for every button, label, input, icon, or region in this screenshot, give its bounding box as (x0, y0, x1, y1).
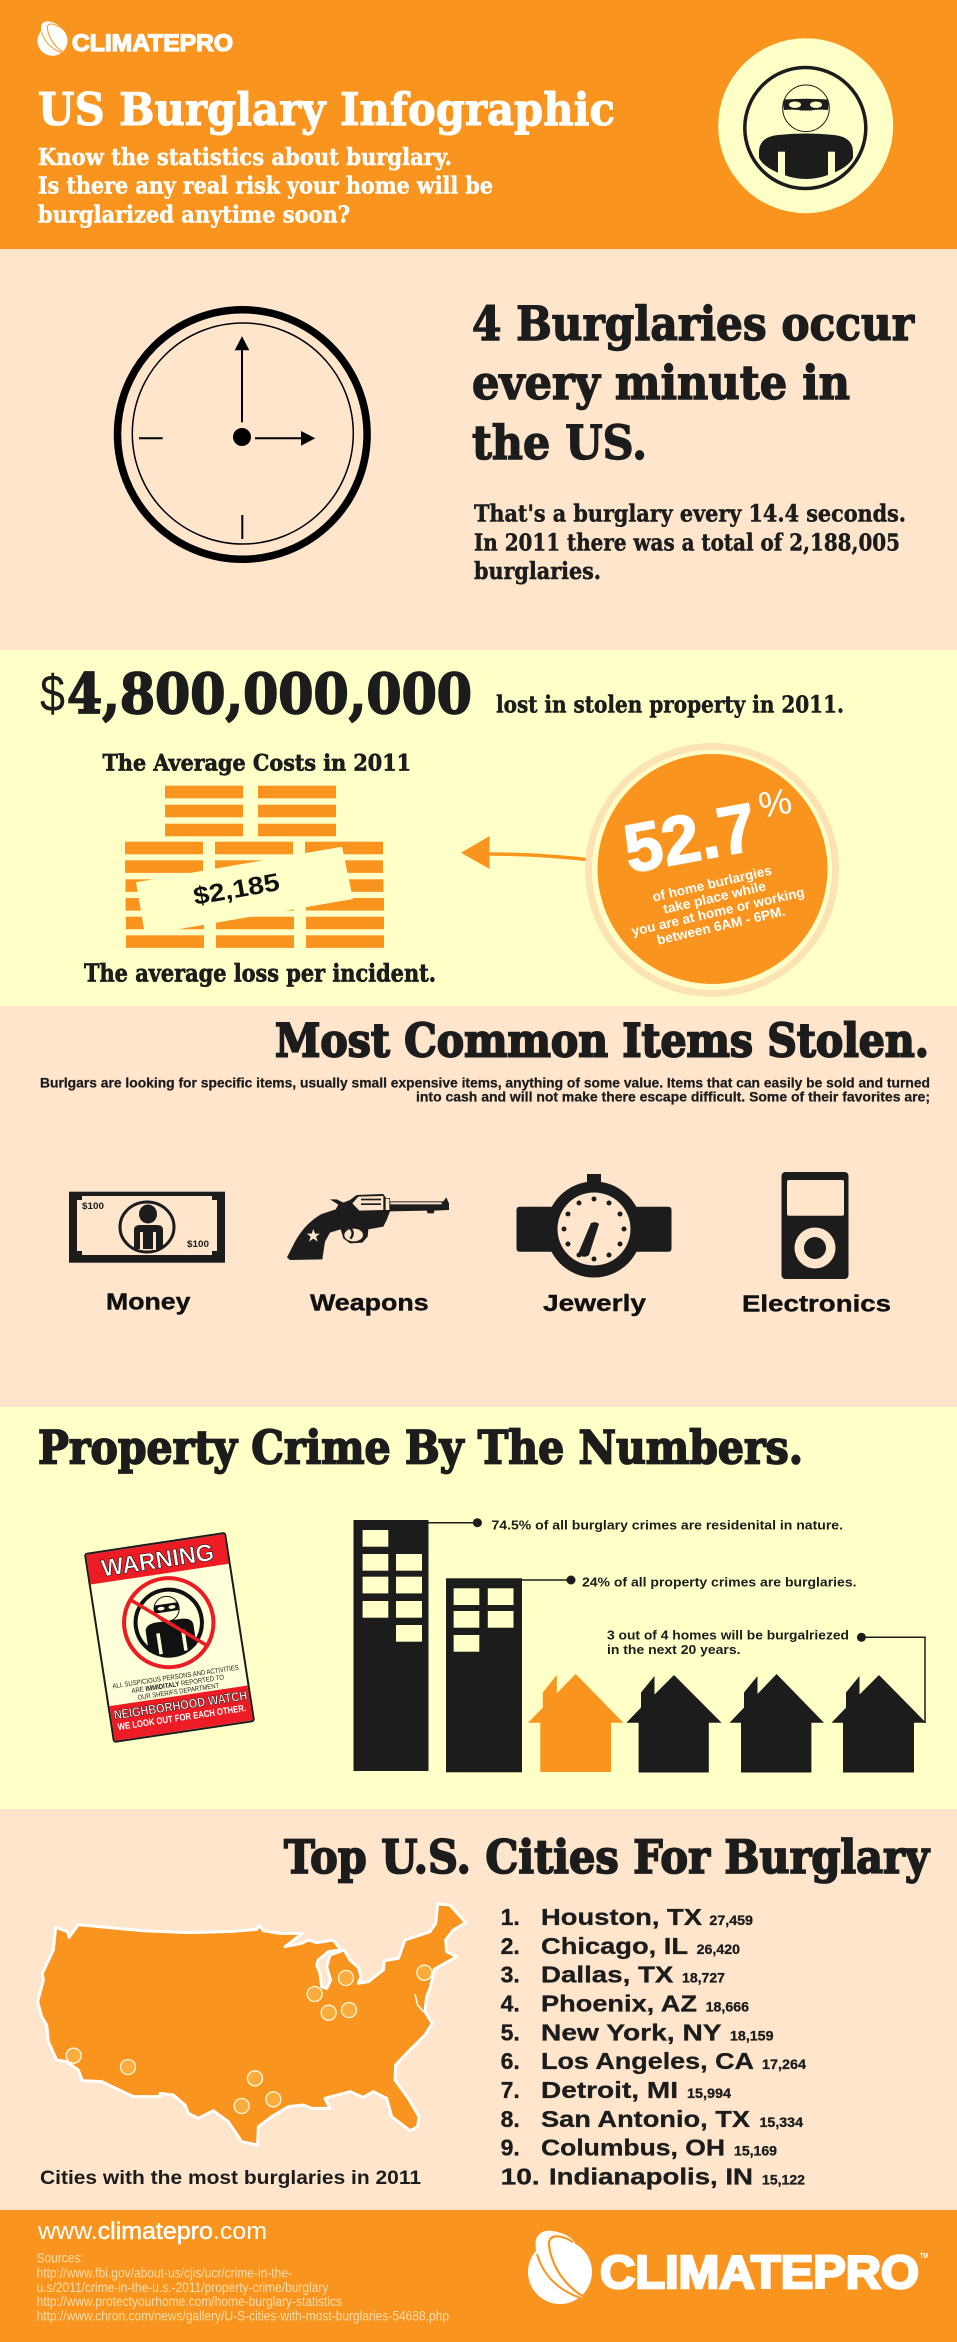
badge: 52.7 percent: 52.7 (618, 789, 763, 888)
list: cities: Detroit, MI (541, 2077, 678, 2103)
icon: revolver (287, 1194, 449, 1260)
icon: black house 3 (832, 1675, 926, 1772)
caption: average loss: The average loss per incident. (84, 959, 436, 988)
chart: stacks of cash (125, 786, 384, 948)
icon: money (69, 1192, 225, 1263)
list: cities: Dallas, TX (541, 1962, 674, 1988)
list: cities: 6. (501, 2048, 520, 2074)
text: sources: http://www.chron.com/news/gallery/U-S-cities-with-most-burglaries-54688.php (37, 2308, 449, 2324)
list: cities: 4. (501, 1990, 520, 2016)
label: $2,185 tag: $2,185 (191, 868, 282, 911)
building: short (446, 1578, 522, 1772)
logo: ClimatePro large: CLIMATEPRO (600, 2246, 919, 2298)
list: cities: 15,122 (762, 2172, 805, 2188)
labels: item names: Money (106, 1288, 190, 1314)
panel: top cities (0, 1809, 957, 2210)
icon: money: $100 (187, 1239, 209, 1250)
sign: neighborhood watch warning: ARE IMMIDITALY REPORTED TO (131, 1674, 225, 1695)
list: cities: 10. (501, 2164, 540, 2190)
list: cities: 26,420 (697, 1942, 740, 1957)
callout: 3 out of 4 homes (607, 1628, 925, 1723)
callout: 24 percent: 24% of all property crimes are burglaries. (582, 1576, 856, 1590)
labels: item names: Electronics (742, 1291, 891, 1317)
list: cities: 17,264 (762, 2057, 807, 2072)
badge: 52.7 percent: % (755, 780, 795, 826)
icon: black house 2 (730, 1674, 824, 1772)
arrow (461, 836, 600, 869)
icon: money: $100 (82, 1201, 104, 1212)
callout: 3 out of 4 homes: 3 out of 4 homes will be burgalriezed (607, 1628, 849, 1642)
list: cities: Indianapolis, IN (549, 2164, 753, 2190)
icon: black house 1 (626, 1675, 722, 1772)
sign: neighborhood watch warning: NEIGHBORHOOD WATCH (113, 1688, 248, 1723)
text: website: www.climatepro.com (37, 2218, 267, 2245)
labels: item names (106, 1288, 891, 1317)
badge: 52.7 percent: of home burlargies (651, 863, 773, 905)
list: cities: New York, NY (541, 2019, 722, 2045)
panel: footer (0, 2210, 957, 2342)
map: united states (38, 1904, 466, 2145)
logo: ClimatePro small (37, 21, 233, 57)
sign: neighborhood watch warning (85, 1533, 254, 1742)
building: tall (354, 1520, 428, 1771)
text: sources: u.s/2011/crime-in-the-u.s.-2011/property-crime/burglary (37, 2280, 329, 2295)
badge: 52.7 percent: you are at home or working (630, 884, 806, 939)
sign: neighborhood watch warning: WE LOOK OUT FOR EACH OTHER. (117, 1703, 247, 1733)
list: cities: 18,727 (682, 1971, 725, 1986)
list: cities: 15,994 (687, 2086, 732, 2101)
text: burglary every 14.4 seconds: That's a burglary every 14.4 seconds. (474, 500, 906, 528)
stat: 4.8 billion: $ (40, 665, 65, 723)
list: cities: 18,159 (730, 2028, 774, 2043)
list: cities: San Antonio, TX (541, 2106, 751, 2132)
list: cities: 18,666 (706, 2000, 750, 2014)
sign: neighborhood watch warning: ALL SUSPICIOUS PERSONS AND ACTIVITIES (112, 1665, 240, 1690)
list: cities: Chicago, IL (541, 1933, 688, 1959)
stat: 4.8 billion: lost in stolen property in 2011. (496, 691, 844, 719)
heading: 4 burglaries: every minute in (472, 356, 850, 411)
list: cities: 15,334 (760, 2115, 804, 2130)
panel: stolen property costs (0, 650, 957, 1006)
icon: watch (516, 1174, 672, 1278)
list: cities: 1. (501, 1904, 520, 1930)
list: cities: 2. (501, 1933, 520, 1959)
list: cities: Houston, TX (541, 1904, 703, 1930)
callout: 3 out of 4 homes: in the next 20 years. (607, 1643, 740, 1657)
list: cities: 3. (501, 1962, 520, 1988)
subtitle: Is there any real risk your home will be (38, 172, 493, 200)
list: cities: 15,169 (734, 2144, 777, 2159)
list: cities: 9. (501, 2135, 520, 2161)
heading: 4 burglaries: 4 Burglaries occur (472, 297, 915, 352)
sign: neighborhood watch warning: WARNING (100, 1539, 216, 1583)
heading: average costs: The Average Costs in 2011 (102, 751, 411, 777)
badge: 52.7 percent (585, 743, 839, 997)
icon: burglar in circle (718, 38, 893, 213)
panel: most common items stolen (0, 1006, 957, 1407)
text: burglary every 14.4 seconds: burglaries. (474, 557, 601, 585)
text: sources (37, 2250, 449, 2324)
panel: property crime numbers (0, 1407, 957, 1809)
caption: cities: Cities with the most burglaries in 2011 (40, 2167, 421, 2189)
text: sources: http://www.protectyourhome.com/home-burglary-statistics (37, 2294, 342, 2309)
logo: ClimatePro small: CLIMATEPRO (72, 30, 233, 57)
list: cities: Columbus, OH (541, 2135, 725, 2161)
text: sources: Sources: (37, 2250, 84, 2266)
logo: ClimatePro large: TM (920, 2253, 928, 2260)
heading: 4 burglaries (472, 297, 915, 471)
icon: music player (782, 1172, 848, 1279)
text: intro: Burlgars are looking for specific items, usually small expensive items, anything of some value. Items that can easily be sold and turned (40, 1075, 930, 1090)
icon: orange house (528, 1674, 623, 1772)
sign: neighborhood watch warning: OUR SHERIFS DEPARTMENT (137, 1683, 220, 1702)
text: intro (40, 1075, 930, 1105)
heading: property crime: Property Crime By The Numbers. (38, 1420, 803, 1474)
logo: ClimatePro large (528, 2231, 928, 2304)
list: cities (501, 1904, 807, 2190)
text: sources: http://www.fbi.gov/about-us/cjis/ucr/crime-in-the- (37, 2266, 292, 2280)
subtitle: burglarized anytime soon? (38, 201, 350, 229)
list: cities: 5. (501, 2019, 520, 2045)
badge: 52.7 percent: between 6AM - 6PM. (655, 904, 786, 948)
subtitle: Know the statistics about burglary. (38, 143, 452, 171)
subtitle (38, 143, 493, 229)
list: cities: Phoenix, AZ (541, 1990, 697, 2016)
panel: burglaries per minute (0, 249, 957, 650)
list: cities: 8. (501, 2106, 520, 2132)
heading: 4 burglaries: the US. (472, 416, 647, 471)
stat: 4.8 billion (40, 661, 844, 726)
text: intro: into cash and will not make there escape difficult. Some of their favorites are; (416, 1090, 930, 1105)
labels: item names: Jewerly (543, 1290, 646, 1316)
icon: clock (118, 310, 367, 559)
list: cities: Los Angeles, CA (541, 2048, 754, 2074)
list: cities: 27,459 (709, 1913, 753, 1928)
list: cities: 7. (501, 2077, 520, 2103)
panel: header (0, 0, 957, 249)
stat: 4.8 billion: 4,800,000,000 (67, 661, 472, 726)
text: burglary every 14.4 seconds (474, 500, 906, 585)
title: US Burglary Infographic (38, 83, 615, 136)
label: $2,185 tag (136, 847, 353, 935)
callout: 74.5 percent: 74.5% of all burglary crimes are residenital in nature. (492, 1518, 843, 1532)
labels: item names: Weapons (310, 1290, 429, 1316)
badge: 52.7 percent: take place while (662, 878, 768, 917)
